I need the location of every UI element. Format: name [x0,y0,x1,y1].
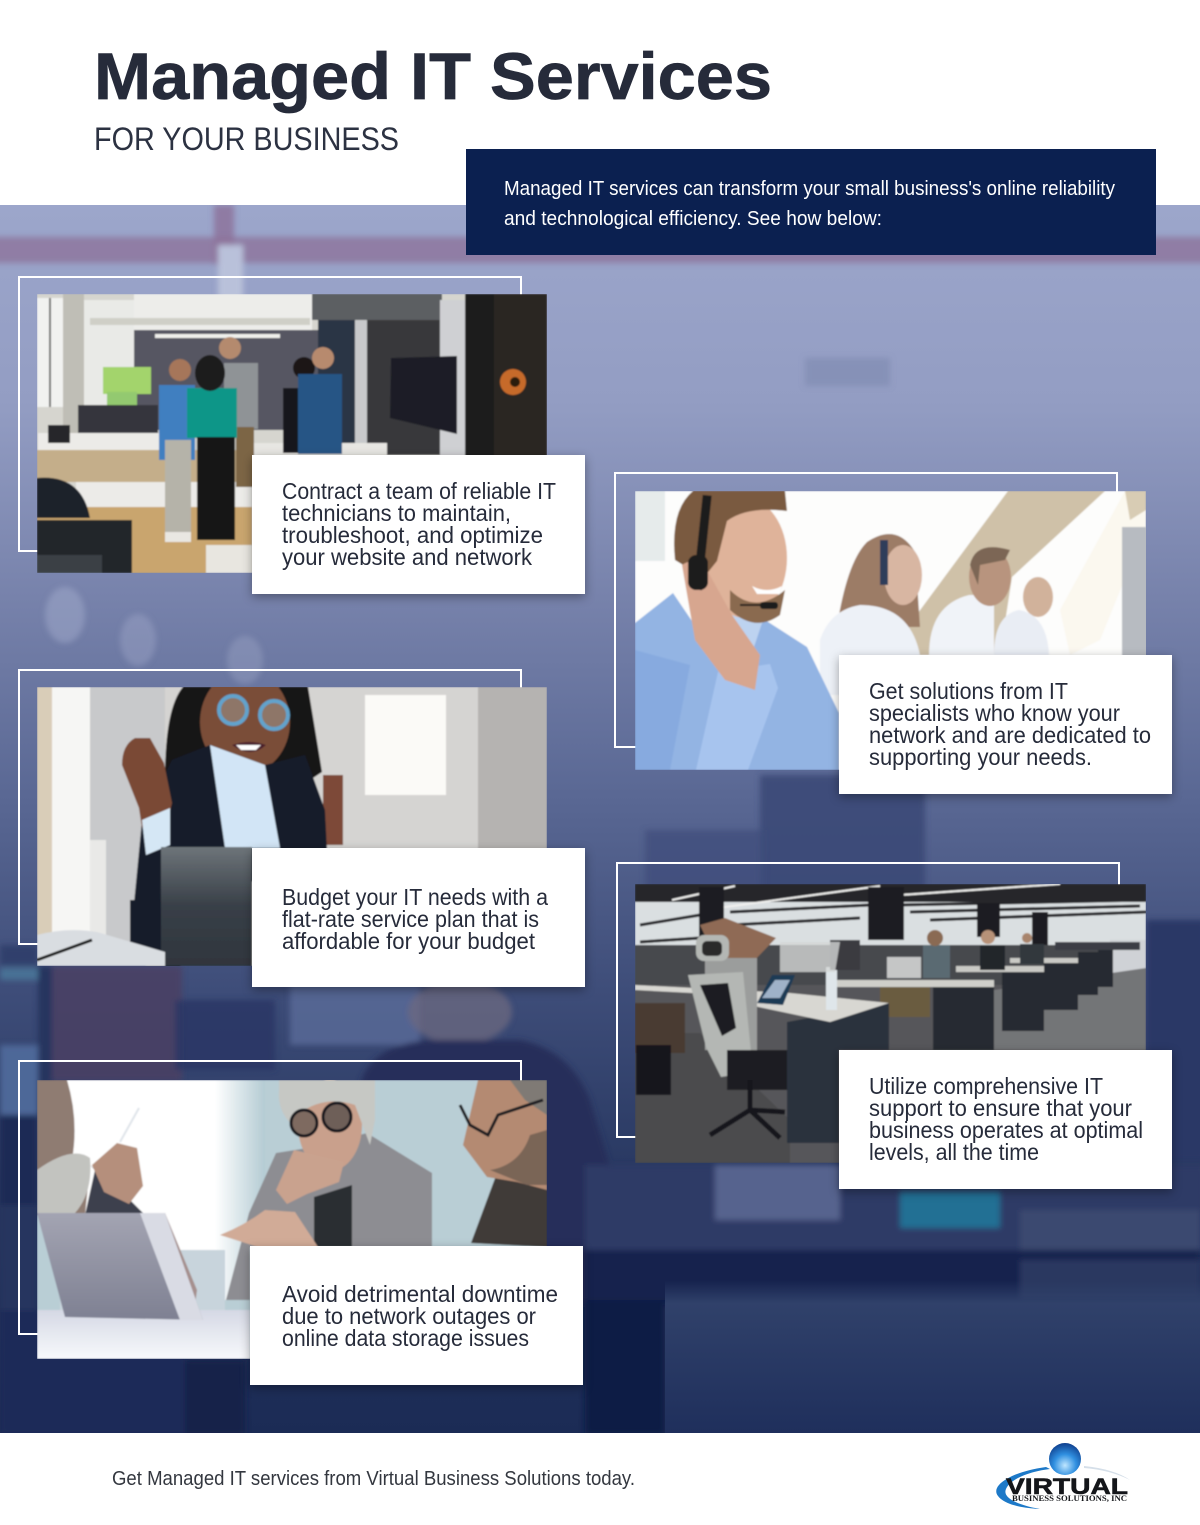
text card [252,455,585,594]
photo: team in office [37,294,547,573]
text card: business operates at optimal [869,1117,1143,1143]
panel: reliable technicians [19,277,585,594]
text card: Contract a team of reliable IT [282,478,556,504]
photo: businesswoman at laptop [37,687,547,966]
text card: due to network outages or [282,1303,536,1329]
intro panel [466,149,1156,255]
logo: Virtual Business Solutions [996,1443,1130,1509]
photo: open-plan IT office [635,884,1146,1163]
text card: network and are dedicated to [869,722,1151,748]
text card: troubleshoot, and optimize [282,522,543,548]
photo: call centre agent [635,491,1147,770]
text card: flat-rate service plan that is [282,906,539,932]
text card: your website and network [282,544,532,570]
text card: affordable for your budget [282,928,536,954]
text card: support to ensure that your [869,1095,1132,1121]
text card: Avoid detrimental downtime [282,1281,558,1307]
logo: Virtual Business Solutions: BUSINESS SOLUTIONS, INC [1012,1494,1127,1503]
panel: IT specialists [615,473,1172,794]
text card: supporting your needs. [869,744,1092,770]
text card: Utilize comprehensive IT [869,1073,1103,1099]
text card [839,1050,1172,1189]
logo: Virtual Business Solutions: VIRTUAL [1006,1474,1128,1499]
text card: Get solutions from IT [869,678,1068,704]
intro panel: and technological efficiency. See how below: [504,208,882,230]
text card: specialists who know your [869,700,1120,726]
title: Managed IT Services [94,39,772,113]
text card [839,655,1172,794]
text card: levels, all the time [869,1139,1039,1165]
panel: comprehensive support [617,863,1172,1189]
panel: avoid downtime [19,1061,583,1385]
text card [250,1246,583,1385]
text card: online data storage issues [282,1325,529,1351]
footer text: Get Managed IT services from Virtual Business Solutions today. [112,1468,635,1490]
subtitle: FOR YOUR BUSINESS [94,121,399,157]
text card: Budget your IT needs with a [282,884,548,910]
text card [252,848,585,987]
photo: colleagues in discussion [37,1079,547,1359]
panel: flat-rate budget [19,670,585,988]
text card: technicians to maintain, [282,500,511,526]
intro panel: Managed IT services can transform your small business's online reliability [504,178,1115,200]
